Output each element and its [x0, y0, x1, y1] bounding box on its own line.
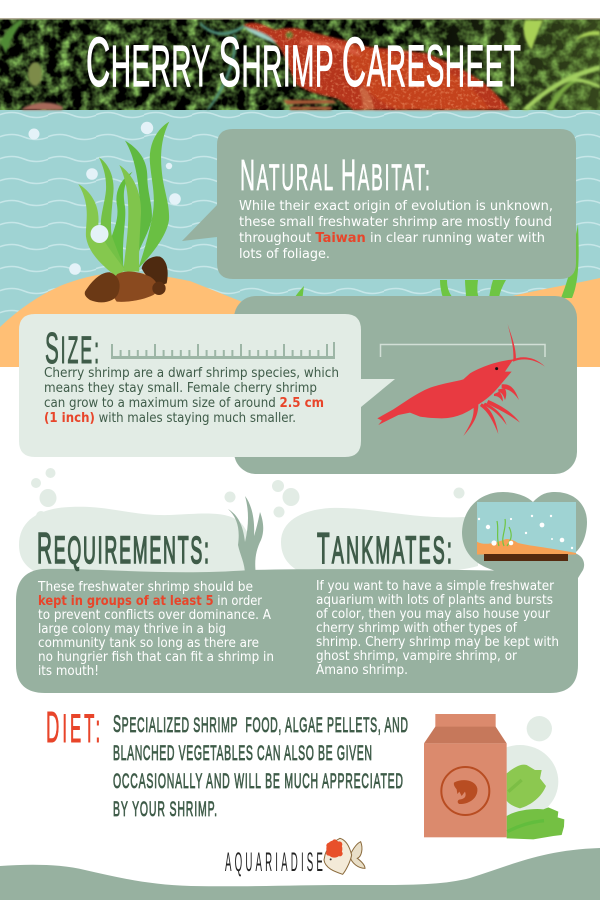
text: diet body: BY YOUR SHRIMP. — [113, 797, 217, 821]
text: tankmates body: of color, then you may also house your — [316, 607, 550, 622]
text: diet body: OCCASIONALLY AND WILL BE MUCH APPRECIATED — [113, 769, 403, 793]
body text: throughout Taiwan in clear running water with — [239, 231, 545, 246]
illustration: shrimp food box and lettuce — [424, 714, 564, 839]
scale bracket — [380, 344, 545, 357]
heading: diet: DIET: — [46, 703, 100, 752]
illustration: seaweed, rocks and bubbles — [28, 122, 181, 302]
icon: red cherry shrimp — [377, 324, 545, 436]
box emblem — [441, 767, 489, 815]
speech bubble — [182, 129, 576, 279]
panel: size — [19, 314, 395, 457]
bubbles behind — [482, 716, 558, 818]
body text: Cherry shrimp are a dwarf shrimp species, which — [44, 366, 339, 381]
body text — [239, 199, 553, 262]
heading: NATURAL HABITAT: — [240, 152, 430, 200]
icon: goldfish — [324, 838, 365, 874]
panel: requirements and tankmates body — [16, 569, 578, 693]
photo banner with shrimp — [0, 18, 600, 110]
body text: these small freshwater shrimp are mostly found — [239, 215, 552, 230]
bubbles above requirements and tankmates — [31, 468, 464, 521]
logo: aquariadise — [225, 838, 365, 878]
box — [435, 714, 496, 727]
text: requirements body: to prevent conflicts over dominance. A — [38, 608, 271, 623]
title: CHERRY SHRIMP CARESHEET — [86, 22, 521, 101]
logo: aquariadise: AQUARIADISE — [225, 848, 323, 878]
rocks — [85, 256, 168, 302]
sand seabed — [0, 272, 600, 367]
text: requirements body: no hungrier fish that can fit a shrimp in — [38, 650, 274, 665]
panel: shrimp scale background — [234, 296, 577, 474]
text: requirements body: its mouth! — [38, 664, 99, 679]
text: requirements body: community tank so long as there are — [38, 636, 259, 651]
heading: SIZE: — [45, 325, 99, 373]
text: requirements body: These freshwater shrimp should be — [37, 580, 253, 595]
icon: seaweed silhouette — [228, 496, 263, 575]
heading: requirements: REQUIREMENTS: — [37, 525, 209, 573]
text: diet body: SPECIALIZED SHRIMP FOOD, ALGAE PELLETS, AND — [113, 712, 408, 738]
body text: While their exact origin of evolution is unknown, — [239, 199, 553, 214]
text: requirements body: large colony may thrive in a big — [38, 622, 226, 637]
text: tankmates body: If you want to have a simple freshwater — [316, 579, 554, 594]
text: requirements body — [37, 580, 274, 679]
lettuce leaves — [507, 765, 564, 839]
body text: (1 inch) with males staying much smaller. — [44, 411, 296, 426]
speech bubble — [19, 314, 395, 457]
ruler — [111, 342, 335, 358]
text: tankmates body: cherry shrimp with other types of — [316, 621, 517, 636]
body text: means they stay small. Female cherry shrimp — [44, 381, 317, 396]
text: tankmates body: shrimp. Cherry shrimp may be kept with — [316, 635, 559, 650]
body text — [44, 366, 339, 426]
text: tankmates body: ghost shrimp, vampire shrimp, or — [316, 649, 517, 664]
text: diet body: BLANCHED VEGETABLES CAN ALSO BE GIVEN — [113, 741, 372, 765]
panel: natural habitat — [182, 129, 576, 279]
heading: tankmates: TANKMATES: — [317, 525, 452, 573]
footer wave — [0, 848, 600, 900]
seaweed blades — [78, 122, 169, 277]
tank backdrop blob — [462, 492, 587, 578]
icon: aquarium tank — [477, 502, 576, 561]
text: tankmates body: aquarium with lots of plants and bursts — [316, 593, 553, 608]
text: diet body — [113, 712, 408, 821]
bubbles — [28, 122, 181, 275]
background plants behind size panel — [293, 224, 579, 300]
text: tankmates body: Amano shrimp. — [316, 663, 408, 678]
body text: can grow to a maximum size of around 2.5 cm — [44, 396, 324, 411]
text: tankmates body — [316, 579, 559, 678]
text: requirements body: kept in groups of at least 5 in order — [38, 594, 262, 609]
tankmates light blob — [281, 508, 478, 574]
water background with waves — [0, 110, 600, 360]
body text: lots of foliage. — [239, 247, 330, 262]
requirements light blob — [19, 507, 255, 576]
